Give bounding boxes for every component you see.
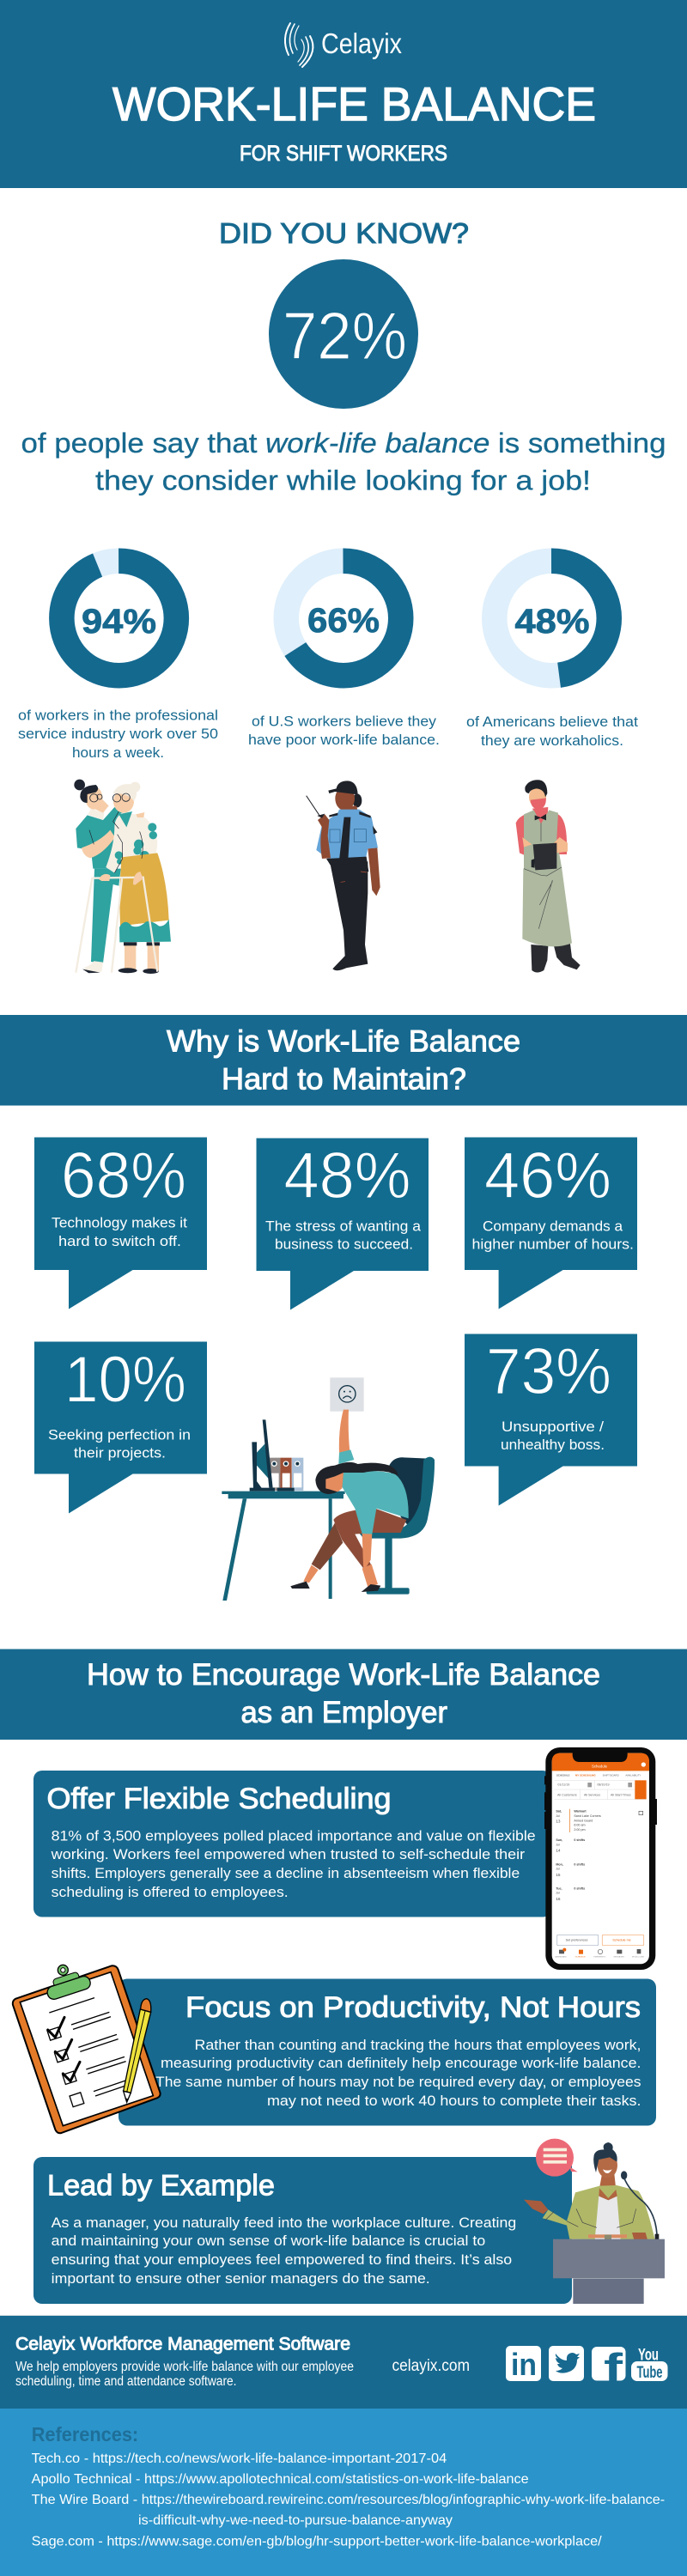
references list: Sage.com - https://www.sage.com/en-gb/blog/hr-support-better-work-life-balance-workplace/ [32, 2535, 602, 2549]
illustration: phone with schedule app [544, 1747, 657, 1970]
references list: is-difficult-why-we-need-to-pursue-balance-anyway [138, 2513, 453, 2528]
icon: twitter [549, 2346, 584, 2381]
panel: focus on productivity: The same number of hours may not be required every day, or employees [155, 2074, 641, 2090]
callout: 68% [34, 1137, 207, 1309]
illustration: phone with schedule app: Mon, [556, 1862, 563, 1866]
donut chart: 48%: 48% [515, 603, 589, 641]
panel: offer flexible scheduling: Offer Flexible Scheduling [46, 1783, 392, 1815]
panel: lead by example: Lead by Example [47, 2169, 275, 2202]
illustration: phone with schedule app: All Customers [557, 1793, 577, 1796]
caption: 66% [248, 714, 440, 748]
caption: 66%: have poor work-life balance. [248, 732, 440, 748]
illustration: phone with schedule app: Jul [556, 1843, 560, 1846]
illustration: phone with schedule app: Sand Lake Corners [574, 1814, 601, 1818]
callout: 10%: Seeking perfection in [48, 1427, 191, 1443]
illustration: nurse and elderly woman with walker [74, 780, 171, 974]
illustration: phone with schedule app: Sat, [556, 1810, 562, 1814]
illustration: phone with schedule app: Set preferences [566, 1939, 588, 1942]
illustration: phone with schedule app: 08/10/19 [597, 1783, 610, 1787]
website: celayix.com [392, 2357, 470, 2375]
references list: Apollo Technical - https://www.apollotechnical.com/statistics-on-work-life-balance [32, 2472, 529, 2487]
callout: 10%: 10% [64, 1343, 186, 1417]
callout: 73%: 73% [486, 1335, 611, 1408]
illustration: phone with schedule app: 15 [556, 1873, 561, 1877]
footer description: We help employers provide work-life balance with our employee [15, 2360, 354, 2374]
callout: 68%: Technology makes it [52, 1215, 187, 1231]
heading: did you know: DID YOU KNOW? [219, 217, 469, 249]
illustration: phone with schedule app: Schedule [592, 1765, 608, 1769]
panel: lead by example: and maintaining your own sense of work-life balance is crucial to [52, 2233, 485, 2249]
illustration: phone with schedule app: SCHEDULE [575, 1956, 586, 1958]
section band: how to encourage [0, 1649, 687, 1740]
donut chart: 94%: 94% [82, 603, 156, 641]
illustration: phone with schedule app: 14 [556, 1849, 561, 1853]
panel: lead by example: ensuring that your employees feel empowered to find theirs. It’s also [52, 2251, 512, 2268]
caption: 66%: of U.S workers believe they [252, 714, 437, 730]
panel: focus on productivity [119, 1978, 656, 2126]
footer heading: Celayix Workforce Management Software [15, 2334, 350, 2354]
stat circle: 72% [269, 259, 418, 409]
title: WORK-LIFE BALANCE [112, 77, 596, 131]
callout: 48% [256, 1139, 429, 1310]
caption: 48%: of Americans believe that [466, 714, 638, 730]
illustration: clipboard with checklist and pencil [13, 1965, 161, 2133]
illustration: phone with schedule app: MY SCHEDULING [575, 1774, 596, 1777]
footer description: scheduling, time and attendance software. [15, 2374, 237, 2389]
stat circle: 72%: 72% [283, 298, 407, 374]
illustration: waiter with mask [516, 780, 581, 972]
stat statement: of people say that work-life balance is something [21, 428, 666, 459]
illustration: phone with schedule app: 01/11/19 [557, 1783, 569, 1787]
caption: 94% [18, 708, 218, 761]
illustration: phone with schedule app: AVAILABILITY [625, 1774, 641, 1777]
section band: how to encourage: How to Encourage Work-Life Balance [87, 1658, 600, 1692]
icon: facebook [592, 2345, 625, 2390]
caption: 48% [466, 714, 638, 749]
illustration: phone with schedule app: Sun, [556, 1838, 562, 1842]
stat statement: they consider while looking for a job! [95, 465, 591, 496]
callout: 73% [465, 1334, 637, 1506]
panel: lead by example: important to ensure other senior managers do the same. [52, 2270, 430, 2287]
illustration: security guard [307, 781, 380, 970]
icon: linkedin: in [511, 2347, 537, 2382]
logo: Celayix: Celayix [321, 27, 402, 59]
footer band [0, 2315, 687, 2409]
subtitle: FOR SHIFT WORKERS [240, 142, 447, 166]
illustration: phone with schedule app: All Services [584, 1793, 600, 1796]
panel: offer flexible scheduling: working. Workers feel empowered when trusted to self-schedule their [51, 1846, 526, 1862]
callout: 46%: 46% [484, 1139, 611, 1212]
section band: how to encourage: as an Employer [240, 1696, 447, 1729]
illustration: phone with schedule app: 0 shifts [574, 1886, 585, 1890]
panel: lead by example: As a manager, you naturally feed into the workplace culture. Creating [52, 2215, 516, 2231]
section band: why hard: Why is Work-Life Balance [167, 1025, 520, 1058]
donut chart: 94% [62, 561, 176, 676]
illustration: phone with schedule app: All Start Times [611, 1793, 631, 1796]
callout: 10%: their projects. [74, 1444, 166, 1461]
illustration: phone with schedule app: Jul [556, 1814, 560, 1818]
illustration: phone with schedule app: Tue, [556, 1886, 562, 1890]
illustration: phone with schedule app: MY ACCOUNT [632, 1955, 645, 1958]
icon: youtube: You [638, 2346, 659, 2365]
logo: Celayix [285, 23, 402, 67]
illustration: phone with schedule app: Jul [556, 1868, 560, 1871]
section band: why hard [0, 1015, 687, 1106]
illustration: phone with schedule app: 2:00 pm [574, 1828, 586, 1832]
references list: The Wire Board - https://thewireboard.rewireinc.com/resources/blog/infographic-why-work-life-balance- [32, 2493, 665, 2507]
panel: offer flexible scheduling: scheduling is offered to employees. [52, 1884, 289, 1900]
callout: 68%: hard to switch off. [58, 1233, 181, 1249]
illustration: phone with schedule app: DASHBOARD [555, 1955, 567, 1958]
illustration: phone with schedule app: TIMESHEETS [593, 1956, 605, 1958]
callout: 48%: business to succeed. [275, 1236, 413, 1252]
panel: focus on productivity: Focus on Productivity, Not Hours [185, 1991, 641, 2024]
illustration: phone with schedule app: SHIFT BOARD [603, 1774, 619, 1777]
panel: offer flexible scheduling: shifts. Employers generally see a decline in absenteeism when flexible [52, 1865, 520, 1881]
illustration: phone with schedule app: 13 [556, 1820, 561, 1824]
icon: facebook: f [604, 2345, 623, 2390]
caption: 94%: service industry work over 50 [18, 726, 218, 742]
callout: 48%: 48% [283, 1139, 410, 1212]
callout: 48%: The stress of wanting a [265, 1218, 422, 1235]
icon: youtube: Tube [637, 2364, 663, 2382]
illustration: phone with schedule app: 16 [556, 1897, 561, 1901]
donut chart: 48% [495, 561, 609, 676]
donut chart: 66%: 66% [307, 602, 380, 640]
illustration: phone with schedule app: MESSAGES [614, 1955, 624, 1958]
header band [0, 0, 687, 188]
panel: focus on productivity: Rather than counting and tracking the hours that employees work, [194, 2037, 641, 2053]
caption: 48%: they are workaholics. [481, 732, 623, 749]
section band: why hard: Hard to Maintain? [222, 1063, 466, 1096]
panel: offer flexible scheduling [33, 1771, 551, 1917]
caption: 94%: of workers in the professional [18, 708, 218, 724]
references list: Tech.co - https://tech.co/news/work-life-balance-important-2017-04 [32, 2451, 447, 2466]
illustration: phone with schedule app: 6:00 am [574, 1824, 586, 1827]
illustration: phone with schedule app: Jul [556, 1892, 560, 1895]
callout: 73%: unhealthy boss. [501, 1437, 605, 1453]
icon: youtube [631, 2346, 668, 2382]
panel: focus on productivity: measuring productivity can definitely help encourage work-life balance. [161, 2055, 641, 2071]
illustration: exhausted woman at desk [222, 1377, 435, 1601]
callout: 10% [34, 1341, 207, 1513]
illustration: phone with schedule app: Walmart [574, 1810, 587, 1814]
stat statement [21, 428, 666, 496]
caption: 94%: hours a week. [72, 744, 164, 761]
illustration: phone with schedule app: 0 shifts [574, 1862, 585, 1866]
panel: lead by example [33, 2157, 572, 2304]
illustration: phone with schedule app: SCHEDULE [556, 1774, 570, 1777]
callout: 73%: Unsupportive / [502, 1419, 604, 1435]
donut chart: 66% [286, 561, 401, 676]
references list [32, 2451, 665, 2549]
references panel [0, 2409, 687, 2576]
illustration: phone with schedule app: Armed Guard [574, 1819, 593, 1822]
callout: 46%: Company demands a [483, 1218, 623, 1235]
panel: offer flexible scheduling: 81% of 3,500 employees polled placed importance and value on flexible [52, 1828, 536, 1844]
illustration: speaker at podium [524, 2139, 665, 2304]
footer description [15, 2360, 354, 2389]
panel: focus on productivity: may not need to work 40 hours to complete their tasks. [267, 2093, 641, 2109]
callout: 68%: 68% [61, 1139, 186, 1212]
references heading: References: [32, 2423, 138, 2445]
callout: 46%: higher number of hours. [472, 1236, 634, 1252]
illustration: phone with schedule app: Schedule me [612, 1939, 631, 1942]
callout: 46% [465, 1137, 637, 1309]
illustration: phone with schedule app: 0 shifts [574, 1838, 585, 1842]
